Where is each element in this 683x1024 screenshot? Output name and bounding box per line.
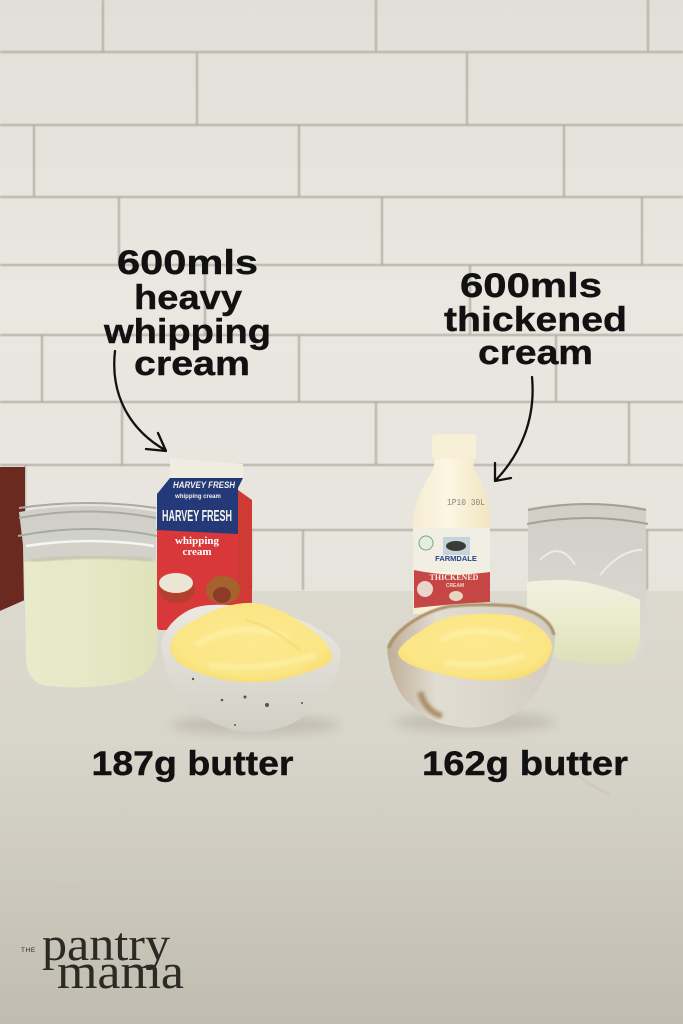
- thickened cream bottle: [413, 434, 490, 614]
- whipping cream carton: whipping cream: [174, 494, 221, 500]
- label: 600mls thickened cream: thickened: [444, 301, 627, 339]
- label: 600mls thickened cream: cream: [478, 334, 593, 372]
- bowl of 162g butter: [387, 604, 555, 728]
- carton blue top: [157, 478, 243, 534]
- whipping cream carton: cream: [182, 546, 212, 558]
- label: 600mls heavy whipping cream: 600mls: [117, 244, 258, 282]
- thickened cream bottle: CREAM: [446, 583, 464, 589]
- arrow: to thickened cream bottle: [495, 377, 533, 481]
- bottle body: [413, 458, 490, 614]
- whipping cream carton: [157, 458, 252, 630]
- label: 600mls heavy whipping cream: cream: [134, 345, 250, 383]
- thickened cream bottle: THICKENED: [430, 573, 479, 582]
- logo: the pantry mama: [21, 918, 184, 999]
- thickened cream bottle: FARMDALE: [435, 554, 477, 563]
- bottle label red: [414, 570, 490, 608]
- left bowl: [161, 605, 341, 732]
- logo: the pantry mama: pantry: [42, 918, 170, 971]
- arrow: to whipping cream carton: [114, 351, 166, 451]
- label: 600mls heavy whipping cream: whipping: [103, 313, 271, 351]
- label: 187g butter: 187g butter: [92, 745, 294, 783]
- whipping cream carton: HARVEY FRESH: [162, 508, 232, 525]
- label: 600mls heavy whipping cream: heavy: [134, 279, 242, 317]
- background: white subway tile wall: [0, 0, 683, 600]
- carton top gable: [170, 458, 243, 479]
- whipping cream carton: whipping: [175, 535, 220, 547]
- label: 162g butter: 162g butter: [422, 745, 628, 783]
- label: 600mls heavy whipping cream: [103, 244, 271, 383]
- carton food pictures: [159, 577, 195, 603]
- glass jar with whipped cream residue: [18, 503, 157, 687]
- label: 600mls thickened cream: 600mls: [460, 267, 602, 305]
- bowl of 187g butter: [161, 603, 341, 732]
- label: 600mls thickened cream: [444, 267, 627, 372]
- bowl shadows: [170, 712, 555, 735]
- right bowl: [387, 604, 555, 728]
- bottle cap: [432, 434, 476, 459]
- bottle label white: [414, 528, 490, 572]
- whipping cream carton: HARVEY FRESH: [173, 480, 236, 491]
- left butter: [170, 603, 332, 682]
- carton red front: [157, 530, 238, 630]
- right butter: [398, 614, 552, 681]
- logo: the pantry mama: mama: [57, 943, 184, 999]
- glass jar with thickened cream residue: [527, 503, 648, 665]
- logo: the pantry mama: THE: [21, 947, 36, 954]
- background: wooden board at left: [0, 467, 25, 611]
- background: marble counter top: [0, 591, 683, 1024]
- carton side panel: [238, 490, 252, 628]
- bottle printed code: 1P10 30L: [447, 498, 485, 508]
